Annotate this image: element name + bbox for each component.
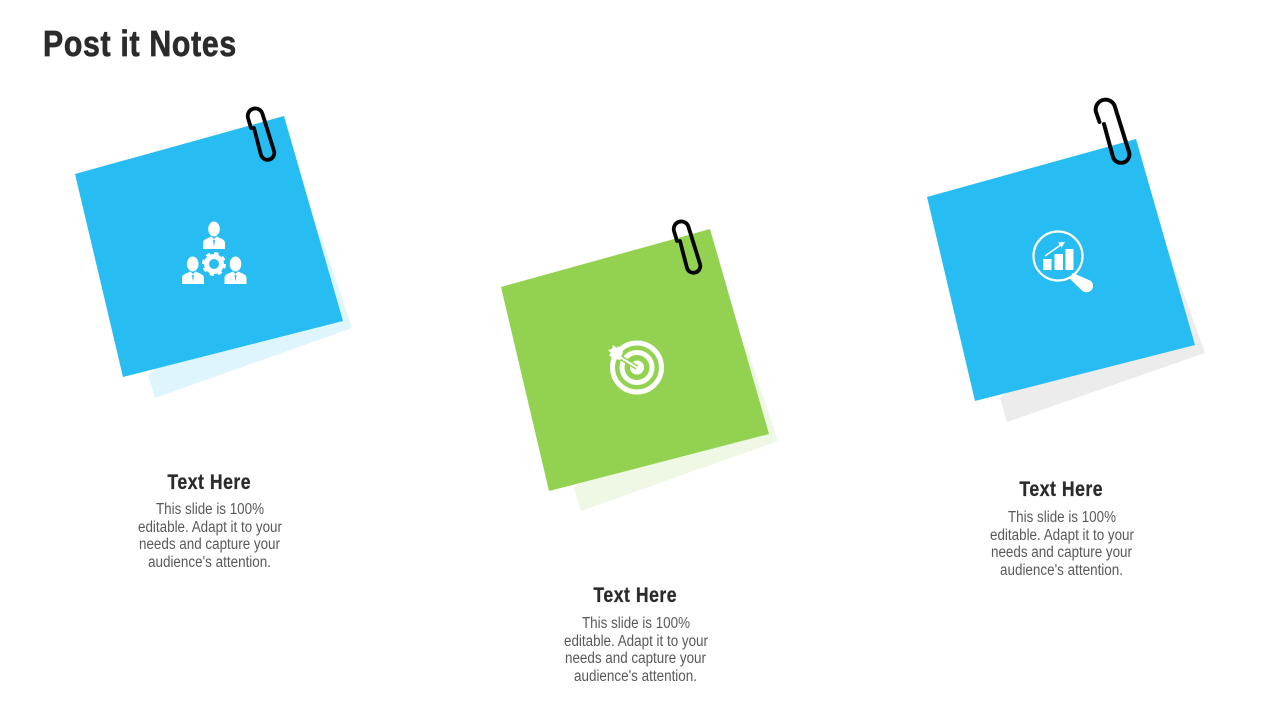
body text: audience's attention. [1000, 562, 1123, 579]
icon: paperclip [248, 108, 274, 160]
body text [990, 509, 1134, 579]
icon: paperclip [674, 221, 700, 273]
body text: This slide is 100% [156, 501, 264, 518]
panel: note 2 [501, 221, 778, 511]
icon: target with arrow [608, 343, 662, 392]
body text: audience's attention. [574, 668, 697, 685]
body text: editable. Adapt it to your [138, 519, 282, 536]
body text: needs and capture your [565, 650, 706, 667]
text block: note 2 caption [564, 584, 708, 685]
body text [564, 615, 708, 685]
note 1 paper [75, 116, 343, 377]
body text: This slide is 100% [1008, 509, 1116, 526]
title: Post it Notes [43, 25, 236, 65]
body text: needs and capture your [139, 536, 280, 553]
panel: note 1 [75, 108, 352, 398]
note 2 paper [501, 229, 769, 491]
body text: needs and capture your [991, 544, 1132, 561]
body text [138, 501, 282, 571]
text block: note 3 caption [990, 478, 1134, 579]
note 3 paper [927, 139, 1195, 401]
note 1 shadow [148, 232, 352, 398]
body text: editable. Adapt it to your [990, 527, 1134, 544]
icon: team with gear [182, 222, 246, 284]
heading: Text Here [167, 471, 251, 494]
heading: Text Here [1019, 478, 1103, 501]
panel: note 3 [927, 100, 1205, 422]
body text: audience's attention. [148, 554, 271, 571]
heading: Text Here [593, 584, 677, 607]
text block: note 1 caption [138, 471, 282, 571]
icon: magnifier with chart [1034, 232, 1093, 292]
note 3 shadow [1000, 250, 1205, 422]
body text: This slide is 100% [582, 615, 690, 632]
body text: editable. Adapt it to your [564, 633, 708, 650]
icon: paperclip [1096, 100, 1129, 163]
note 2 shadow [574, 345, 778, 511]
